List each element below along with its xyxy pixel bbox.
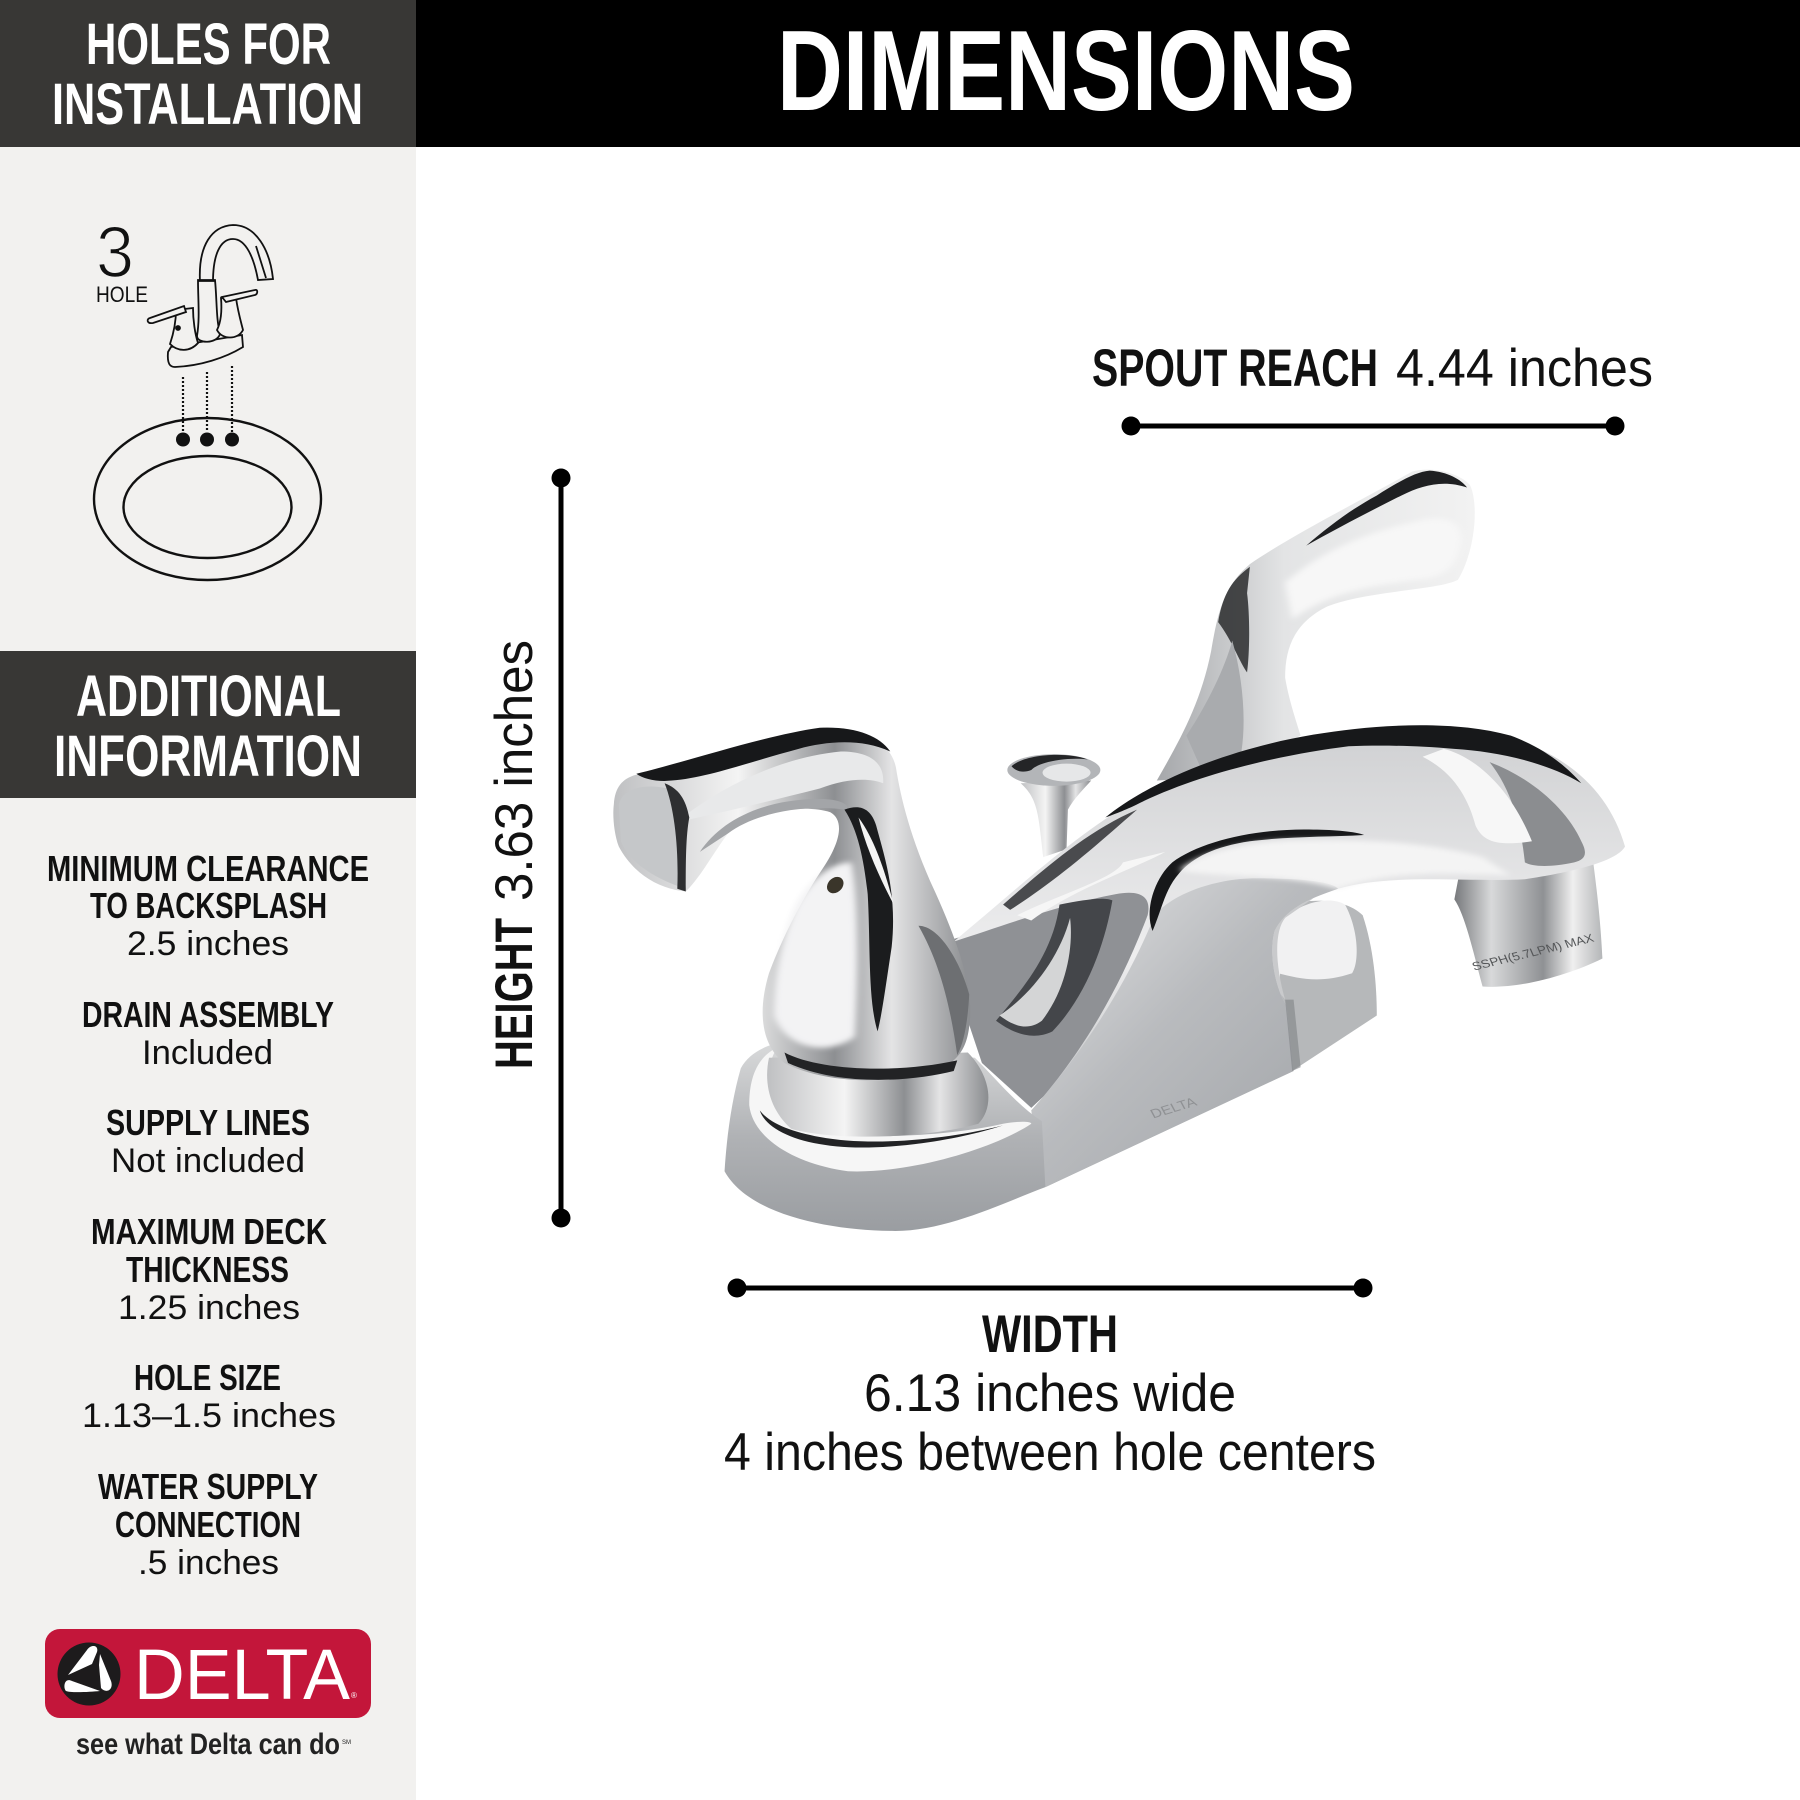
- spec: maximum deck thickness: MAXIMUM DECK: [91, 1211, 327, 1252]
- logo engraving: DELTA: [1148, 1095, 1199, 1122]
- spec: maximum deck thickness: THICKNESS: [126, 1249, 289, 1290]
- panel: left sidebar: [0, 0, 416, 1800]
- text block: additional information list: [47, 848, 369, 1582]
- heading: additional information: INFORMATION: [54, 724, 362, 789]
- spec: minimum clearance: 2.5 inches: [127, 925, 289, 963]
- heading: additional information: [0, 651, 416, 798]
- spec: water supply connection: WATER SUPPLY: [98, 1466, 318, 1507]
- dimension: width: 4 inches between hole centers: [724, 1423, 1376, 1482]
- logo: delta: see what Delta can do: [76, 1728, 340, 1761]
- dotted guide lines: [183, 366, 232, 432]
- spec: drain assembly: Included: [142, 1034, 273, 1072]
- heading: holes for installation: INSTALLATION: [52, 72, 363, 137]
- spec: supply lines: Not included: [111, 1142, 305, 1180]
- spec: maximum deck thickness: [91, 1211, 327, 1327]
- dimension: width: [724, 1278, 1376, 1482]
- stopper lift rod: [1007, 754, 1100, 857]
- icon: small faucet line drawing: [148, 225, 273, 367]
- spec: drain assembly: DRAIN ASSEMBLY: [82, 994, 334, 1035]
- label: 3 hole: [96, 213, 148, 307]
- dimension: height: HEIGHT: [485, 918, 544, 1069]
- dimension: height: 3.63 inches: [485, 640, 544, 901]
- dimension: spout reach: SPOUT REACH: [1092, 339, 1378, 398]
- logo: delta: DELTA: [134, 1636, 351, 1715]
- spec: water supply connection: .5 inches: [138, 1544, 279, 1582]
- shadowed reflection under spout: [954, 884, 1165, 1108]
- left handle collar: [767, 1052, 988, 1137]
- logo: delta: ®: [351, 1691, 357, 1700]
- spec: hole size: [82, 1357, 336, 1435]
- sink outline: [94, 418, 321, 580]
- spec: maximum deck thickness: 1.25 inches: [118, 1289, 300, 1327]
- back handle: [1157, 470, 1475, 781]
- title banner: dimensions: DIMENSIONS: [777, 8, 1355, 135]
- heading: holes for installation: [0, 0, 416, 147]
- left handle with lever and dome: [613, 728, 970, 1080]
- spec: hole size: 1.13–1.5 inches: [82, 1397, 336, 1435]
- arrow: width measure: [728, 1278, 1372, 1298]
- spec: drain assembly: [82, 994, 334, 1072]
- spec: hole size: HOLE SIZE: [134, 1357, 281, 1398]
- spec: water supply connection: CONNECTION: [115, 1504, 301, 1545]
- top edge dark reflection: [1105, 725, 1581, 818]
- logo: delta: [45, 1629, 371, 1761]
- icon: three hole faucet over sink: [94, 213, 321, 580]
- sink holes: [176, 432, 239, 446]
- icon: delta tri-drop mark: [64, 1646, 112, 1692]
- heading: holes for installation: HOLES FOR: [86, 12, 331, 77]
- aerator tip: SSPH(5.7LPM) MAX: [1470, 932, 1596, 973]
- dimension: width: WIDTH: [982, 1305, 1118, 1364]
- dome streaks: [844, 807, 893, 1031]
- spout and central body: [954, 725, 1625, 1187]
- label: 3 hole: 3: [96, 213, 134, 293]
- spec: supply lines: SUPPLY LINES: [106, 1102, 310, 1143]
- inner streak highlight: [1150, 830, 1364, 931]
- aerator tip: [1454, 852, 1602, 987]
- dimension: height: [485, 468, 570, 1228]
- spec: minimum clearance: [47, 848, 369, 963]
- lever top dark edge: [636, 728, 890, 781]
- spec: minimum clearance: MINIMUM CLEARANCE: [47, 848, 369, 889]
- arrow: spout reach measure: [1122, 416, 1624, 436]
- streaks in reflection: [996, 899, 1112, 1036]
- heading: additional information: ADDITIONAL: [76, 664, 341, 729]
- spec: minimum clearance: TO BACKSPLASH: [90, 885, 327, 926]
- lever lit face: [686, 752, 883, 820]
- dimension: spout reach: [1092, 339, 1653, 436]
- label: 3 hole: HOLE: [96, 282, 148, 307]
- dimension: width: 6.13 inches wide: [864, 1364, 1236, 1423]
- spec: water supply connection: [98, 1466, 318, 1582]
- illustration: chrome faucet: [613, 470, 1625, 1231]
- title banner: dimensions: [416, 0, 1800, 147]
- arrow: height measure: [552, 468, 570, 1228]
- rear base and rear collar: [1255, 898, 1377, 1071]
- logo: delta: SM: [342, 1740, 351, 1746]
- base left lobe: [725, 1042, 1045, 1231]
- dimension: spout reach: 4.44 inches: [1396, 339, 1653, 398]
- spec: supply lines: [106, 1102, 310, 1180]
